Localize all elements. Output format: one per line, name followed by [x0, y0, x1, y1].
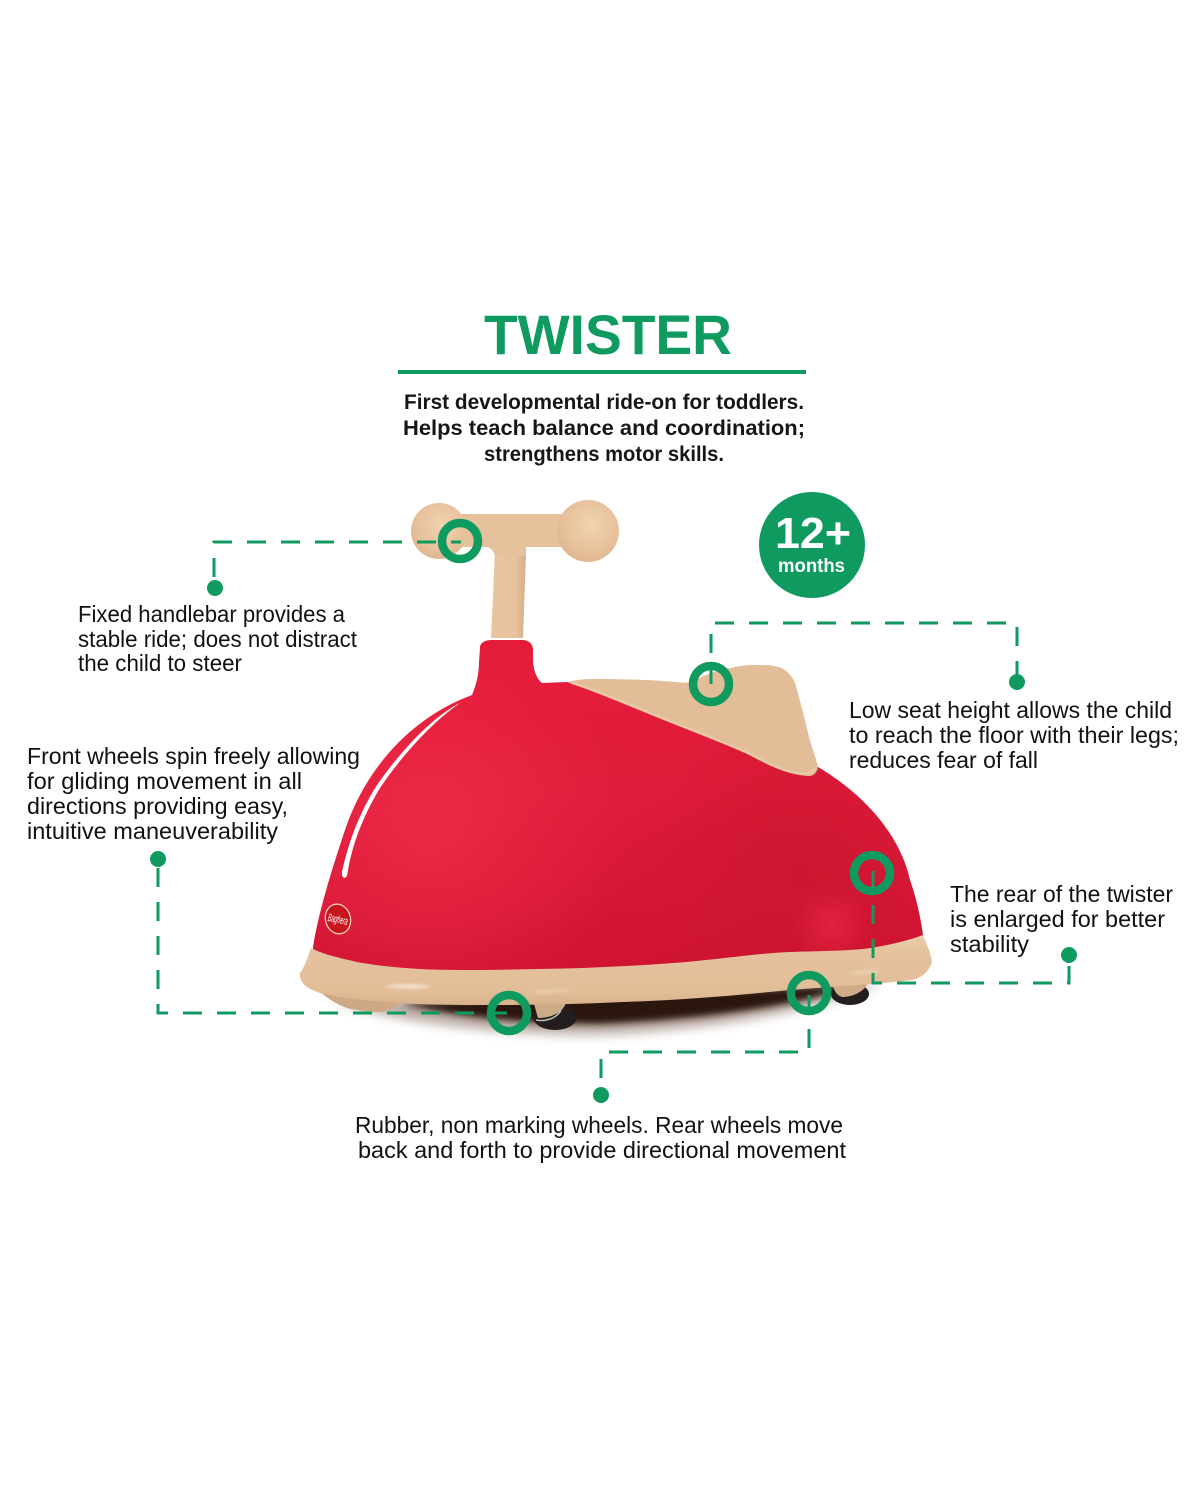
badge: 12+ months: months — [778, 556, 845, 577]
beige base rim — [300, 935, 932, 1005]
red body with neck — [313, 640, 923, 970]
callout: enlarged rear: is enlarged for better — [950, 906, 1165, 932]
callout: handlebar: the child to steer — [78, 650, 242, 676]
intro text — [403, 391, 805, 466]
intro text: Helps teach balance and coordination; — [403, 417, 805, 440]
callout: enlarged rear — [854, 855, 1173, 983]
brand logo — [322, 901, 354, 937]
callout: front wheels: directions providing easy, — [27, 793, 288, 819]
intro text: strengthens motor skills. — [484, 443, 724, 466]
badge: 12+ months: 12+ — [775, 509, 851, 558]
seat — [567, 665, 818, 776]
callout: rubber wheels: Rubber, non marking wheels. Rear wheels move — [355, 1112, 843, 1138]
intro text: First developmental ride-on for toddlers. — [404, 391, 804, 414]
front wheel — [533, 1003, 577, 1030]
brand logo: Baghera — [327, 912, 349, 928]
callout: rubber wheels: back and forth to provide directional movement — [358, 1137, 847, 1163]
callout: enlarged rear: stability — [950, 931, 1030, 957]
white highlight stripe — [342, 703, 460, 878]
callout: handlebar — [78, 523, 478, 676]
infographic canvas — [27, 315, 1177, 1163]
callout: seat: to reach the floor with their legs; — [849, 722, 1179, 748]
callout: seat: reduces fear of fall — [849, 747, 1038, 773]
product: twister ride-on toy — [300, 500, 940, 1035]
ground shadow — [335, 984, 880, 1035]
callout: front wheels: for gliding movement in all — [27, 768, 302, 794]
callout: handlebar: stable ride; does not distract — [78, 626, 358, 652]
callout: rubber wheels — [355, 975, 847, 1163]
rear wheel — [831, 983, 869, 1005]
front underside — [320, 992, 402, 1012]
callout: seat — [693, 623, 1179, 773]
callout: front wheels: intuitive maneuverability — [27, 818, 279, 844]
badge: 12+ months — [759, 492, 865, 598]
callout: handlebar: Fixed handlebar provides a — [78, 601, 345, 627]
callout: enlarged rear: The rear of the twister — [950, 881, 1173, 907]
title: TWISTER — [484, 303, 732, 366]
callout: front wheels — [27, 743, 527, 1031]
callout: seat: Low seat height allows the child — [849, 697, 1172, 723]
callout: front wheels: Front wheels spin freely allowing — [27, 743, 360, 769]
title underline — [398, 370, 806, 374]
handlebar — [411, 500, 619, 638]
